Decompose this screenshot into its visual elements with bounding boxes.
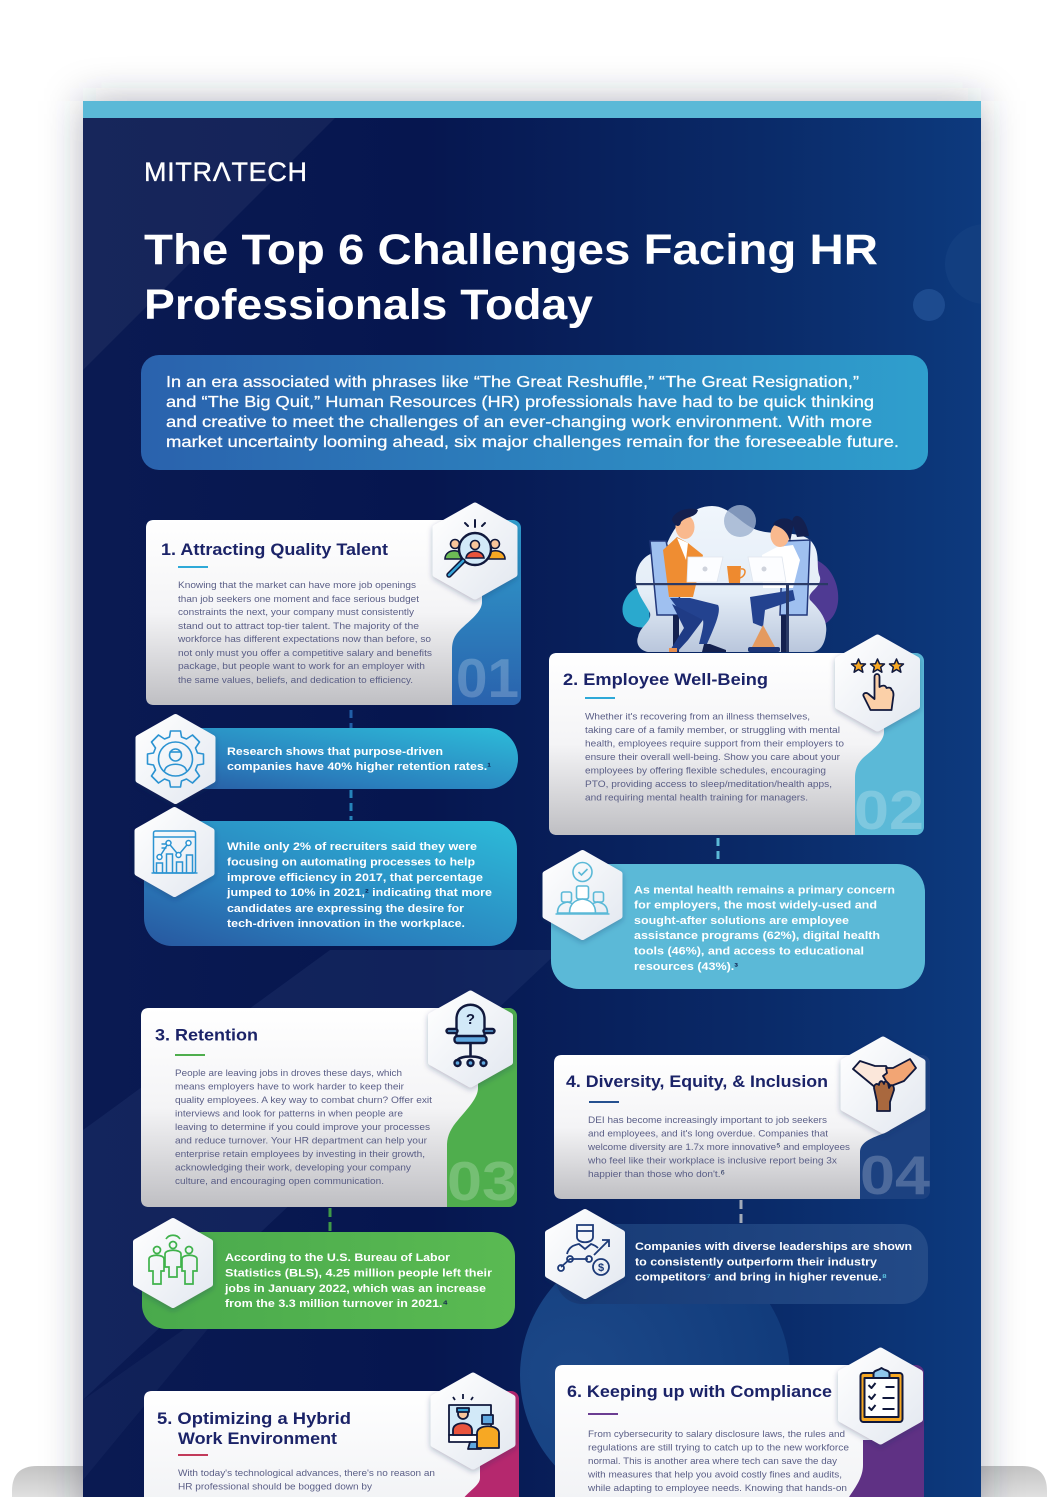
body text: and employees, and it's long overdue. Companies that: [588, 1128, 828, 1138]
big number 04: 04: [860, 1144, 930, 1206]
heading: 6. Keeping up with Compliance: [567, 1383, 832, 1401]
body text: HR professional should be bogged down by: [178, 1480, 372, 1492]
body text: normal. This is another area where tech can save the day: [588, 1455, 837, 1466]
stand base right: [981, 1466, 1047, 1497]
icon: leader with growth arrow and dollar: [548, 1212, 622, 1296]
body text: enterprise retain employees by investing in their growth,: [175, 1148, 425, 1159]
body text: [177, 579, 432, 685]
icon: remote meeting on monitor: [434, 1376, 512, 1466]
big number 02: 02: [854, 779, 924, 841]
body text: [175, 1067, 432, 1186]
icon: analytics screen: [138, 810, 212, 894]
poster drop shadow: [83, 101, 981, 1497]
callout: mental health solutions: tools (46%), and access to educational: [634, 946, 864, 958]
heading: 5. Optimizing a Hybrid: [157, 1410, 351, 1428]
body text: taking care of a family member, or struggling with mental: [585, 724, 840, 735]
heading: 2. Employee Well-Being: [563, 671, 768, 689]
callout: mental health solutions: for employers, the most widely-used and: [634, 900, 877, 912]
panel: introduction: and creative to meet the challenges of an ever-changing work environment. With more: [166, 414, 872, 431]
body text: the same values, beliefs, and dedication to efficiency.: [178, 674, 413, 685]
body text: means employers have to work harder to keep their: [175, 1080, 404, 1092]
body text: interviews and look for patterns in when people are: [175, 1108, 403, 1118]
callout: diverse leadership: Companies with diverse leaderships are shown: [635, 1241, 912, 1253]
heading: 3. Retention: [155, 1026, 258, 1044]
body text: with measures that help you avoid costly fines and audits,: [587, 1468, 842, 1480]
callout: automation in recruiting: [144, 821, 517, 946]
callout: diverse leadership: [556, 1224, 928, 1304]
body text: happier than those who don't. ⁶: [588, 1168, 725, 1180]
callout: automation in recruiting: focusing on automating processes to help: [227, 856, 475, 868]
connector dashes: [330, 710, 741, 1232]
body text: leaving to determine if you could improve your processes: [175, 1121, 430, 1132]
body text: [178, 1467, 435, 1492]
body text: DEI has become increasingly important to job seekers: [588, 1114, 827, 1125]
panel: introduction: market uncertainty looming ahead, six major challenges remain for the foreseeable future.: [166, 434, 899, 451]
callout: BLS turnover figures: Statistics (BLS), 4.25 million people left their: [225, 1268, 493, 1280]
panel: introduction: In an era associated with phrases like “The Great Reshuffle,” “The Great Resignation,”: [166, 374, 859, 391]
panel: 2 Employee Well-Being: [549, 653, 924, 841]
heading: Work Environment: [178, 1430, 338, 1448]
icon: stars and pointing hand: [838, 638, 916, 728]
big number 01: 01: [456, 647, 519, 709]
panel: 5 Optimizing a Hybrid Work Environment: [144, 1391, 519, 1497]
body text: while adapting to employee needs. Knowing that hands-on: [587, 1482, 847, 1493]
stand base left: [12, 1466, 83, 1497]
body text: workforce has different expectations now than before, so: [177, 633, 431, 644]
callout: automation in recruiting: tech-driven innovation in the workplace.: [227, 918, 465, 930]
body text: Whether it's recovering from an illness themselves,: [585, 710, 810, 722]
callout: mental health solutions: As mental health remains a primary concern: [634, 884, 895, 896]
panel: introduction: and “The Big Quit,” Human Resources (HR) professionals have had to be quick thinking: [166, 394, 874, 411]
title: Professionals Today: [144, 281, 593, 329]
callout: BLS turnover figures: jobs in January 2022, which was an increase: [224, 1283, 486, 1295]
body text: regulations are still trying to catch up to the new workforce: [588, 1442, 849, 1452]
body text: culture, and encouraging open communication.: [175, 1175, 384, 1186]
body text: and requiring mental health training for managers.: [585, 792, 808, 802]
body text: and reduce turnover. Your HR department can help your: [175, 1134, 427, 1146]
illustration: two colleagues at a table: [622, 505, 838, 652]
callout: BLS turnover figures: [142, 1232, 515, 1329]
callout: mental health solutions: resources (43%). ³: [634, 961, 739, 973]
heading: 1. Attracting Quality Talent: [161, 541, 389, 559]
callout: mental health solutions: [551, 864, 925, 989]
heading: [157, 1410, 351, 1448]
title: The Top 6 Challenges Facing HR: [144, 226, 878, 274]
body text: From cybersecurity to salary disclosure laws, the rules and: [588, 1428, 845, 1439]
callout: mental health solutions: assistance programs (62%), digital health: [634, 930, 880, 942]
title: [144, 226, 878, 329]
body text: quality employees. A key way to combat churn? Offer exit: [175, 1094, 432, 1105]
body text: [587, 1428, 849, 1493]
icon: magnifier over people: [436, 506, 514, 596]
body text: [587, 1114, 850, 1180]
heading: 4. Diversity, Equity, & Inclusion: [566, 1073, 828, 1091]
body text: constraints the next, your company must consistently: [178, 606, 414, 617]
logo: Mitratech: MITRΛTECH: [144, 157, 307, 187]
big number 03: 03: [447, 1150, 517, 1212]
callout: mental health solutions: sought-after solutions are employee: [634, 915, 849, 927]
icon: team with checkmark: [546, 853, 620, 937]
icon: group of employees: [136, 1221, 210, 1305]
body text: People are leaving jobs in droves these days, which: [175, 1067, 402, 1078]
body text: stand out to attract top-tier talent. The majority of the: [178, 620, 419, 631]
icon: gear with person: [138, 717, 212, 801]
icon: empty office chair: ?: [466, 1011, 475, 1028]
callout: BLS turnover figures: According to the U.S. Bureau of Labor: [225, 1252, 451, 1264]
callout: diverse leadership: to consistently outperform their industry: [635, 1256, 878, 1268]
body text: not only must you offer a competitive salary and benefits: [178, 647, 432, 658]
panel: 4 Diversity, Equity, & Inclusion: [554, 1055, 930, 1206]
icon: leader with growth arrow and dollar: $: [598, 1262, 604, 1274]
panel: 1 Attracting Quality Talent: [146, 520, 521, 709]
body text: welcome diversity are 1.7x more innovative ⁵ and employees: [587, 1141, 850, 1153]
callout: automation in recruiting: improve efficiency in 2017, that percentage: [227, 872, 483, 884]
body text: ensure their overall well-being. Show you care about your: [585, 751, 840, 762]
body text: PTO, providing access to sleep/meditation/health apps,: [585, 778, 832, 789]
body text: package, but people want to work for an employer with: [178, 660, 425, 671]
body text: health, employees require support from their employers to: [585, 738, 844, 748]
callout: retention rates: [143, 728, 518, 789]
body text: than job seekers one moment and face serious budget: [178, 593, 419, 604]
body text: [585, 710, 844, 802]
body text: who feel like their workplace is inclusive report being 3x: [587, 1154, 837, 1166]
callout: automation in recruiting: candidates are expressing the desire for: [227, 903, 465, 915]
icon: compliance clipboard: [842, 1351, 920, 1441]
callout: BLS turnover figures: from the 3.3 million turnover in 2021. ⁴: [225, 1298, 448, 1310]
body text: employees by offering flexible schedules, encouraging: [585, 764, 826, 776]
icon: three joined hands: [844, 1040, 922, 1130]
panel: 3 Retention: [141, 1008, 517, 1212]
callout: diverse leadership: competitors ⁷ and bring in higher revenue. ⁸: [635, 1272, 887, 1284]
panel: introduction: [141, 355, 928, 470]
panel: 6 Keeping up with Compliance: [555, 1365, 924, 1497]
callout: automation in recruiting: While only 2% of recruiters said they were: [227, 841, 477, 853]
body text: With today's technological advances, there's no reason an: [178, 1467, 435, 1478]
callout: automation in recruiting: jumped to 10% in 2021, ² indicating that more: [226, 887, 492, 899]
icon: empty office chair: [432, 994, 510, 1084]
callout: retention rates: companies have 40% higher retention rates. ¹: [227, 761, 492, 773]
body text: acknowledging their work, developing your company: [175, 1162, 411, 1172]
body text: Knowing that the market can have more job openings: [178, 579, 416, 590]
callout: retention rates: Research shows that purpose-driven: [227, 746, 443, 758]
